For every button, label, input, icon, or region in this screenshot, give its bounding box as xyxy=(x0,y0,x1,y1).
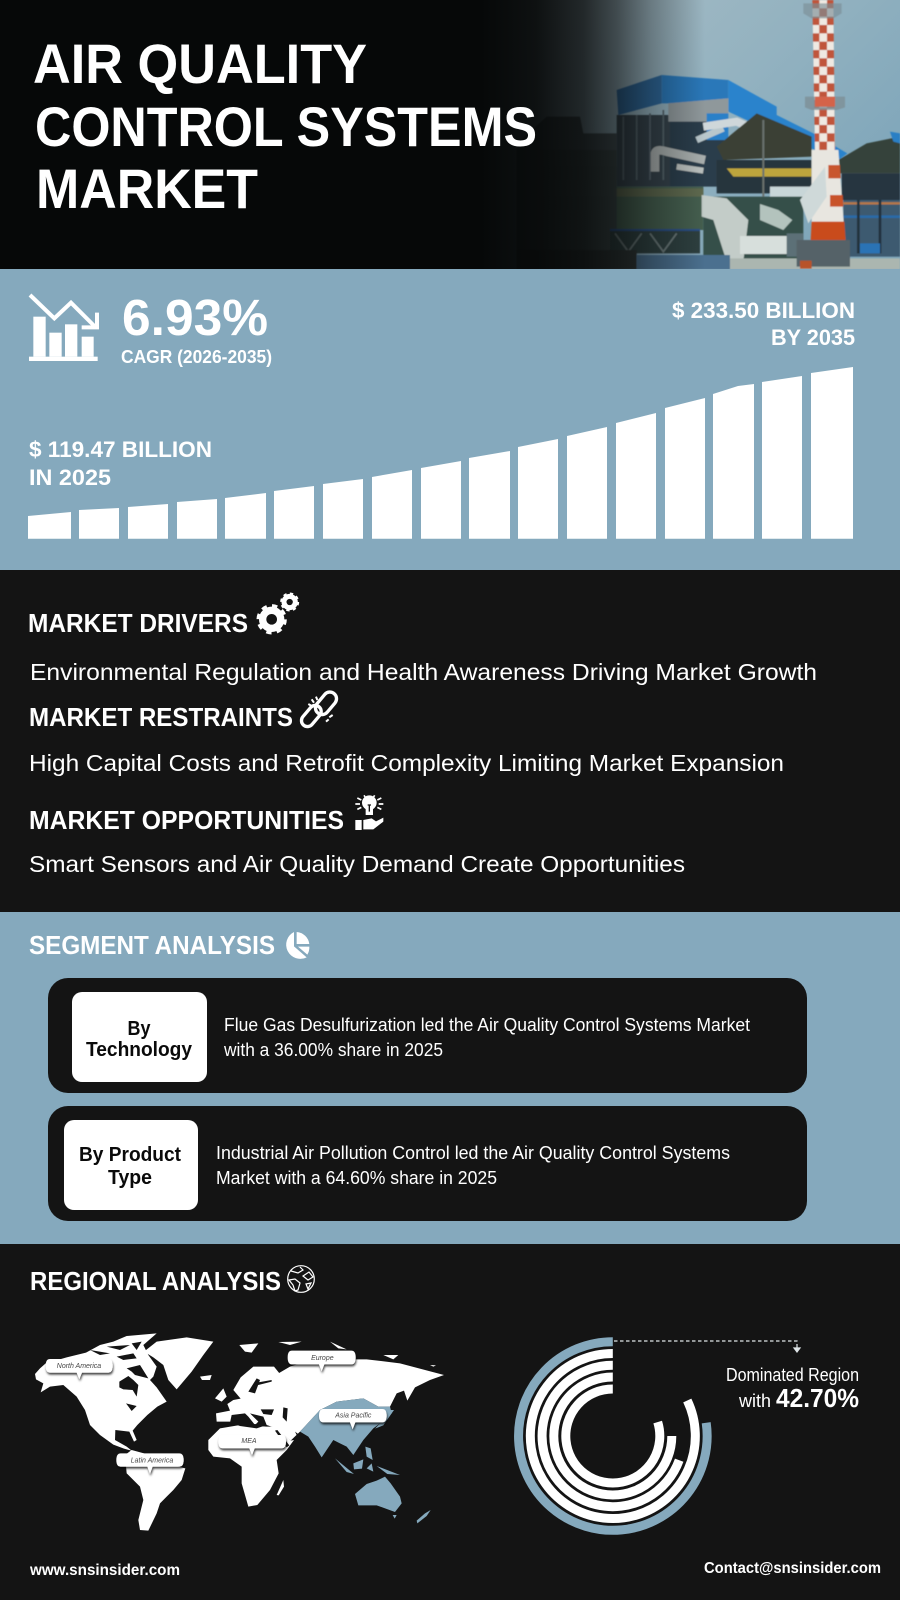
text: dominated region share: 42.70% xyxy=(776,1383,859,1413)
right structures xyxy=(838,137,900,173)
text: restraint: High Capital Costs and Retrofit Complexity Limiting Market Expansion xyxy=(29,750,784,776)
title xyxy=(33,32,537,220)
map: Asia Pacific highlighted xyxy=(300,1398,431,1523)
panel: regional analysis xyxy=(0,1244,900,1600)
blue building xyxy=(617,75,662,115)
label box: By xyxy=(128,1018,151,1040)
card: by product type xyxy=(48,1106,807,1221)
icon: chart with falling arrow xyxy=(29,295,98,361)
heading: segment analysis: SEGMENT ANALYSIS xyxy=(29,930,275,960)
start value xyxy=(29,437,212,490)
heading: regional analysis: REGIONAL ANALYSIS xyxy=(30,1266,281,1296)
green precipitator xyxy=(610,187,703,230)
callout: Europe: Europe xyxy=(311,1355,334,1362)
world map xyxy=(35,1333,444,1531)
photo: industrial air quality plant xyxy=(450,0,900,270)
arrow: dashed leader line xyxy=(614,1341,800,1352)
icon: globe xyxy=(288,1266,314,1292)
callout: Latin America xyxy=(116,1453,184,1474)
end value: $ 233.50 BILLION xyxy=(672,298,855,323)
panel: market dynamics xyxy=(0,570,900,912)
callout: Europe xyxy=(288,1351,356,1371)
text: dominated region share: with xyxy=(738,1391,771,1411)
panel: segment analysis xyxy=(0,912,900,1244)
start value: $ 119.47 BILLION xyxy=(29,437,212,462)
callout: MEA xyxy=(218,1435,286,1455)
CAGR value: 6.93% xyxy=(122,289,268,346)
text block: with a 36.00% share in 2025 xyxy=(223,1040,443,1060)
text block: Market with a 64.60% share in 2025 xyxy=(216,1168,497,1188)
text: dominated region share: Dominated Region xyxy=(726,1365,859,1385)
text block: Industrial Air Pollution Control led the Air Quality Control Systems xyxy=(216,1143,730,1163)
chimney xyxy=(812,0,835,150)
footer: website: www.snsinsider.com xyxy=(29,1562,180,1579)
ground xyxy=(517,250,637,269)
label box xyxy=(72,992,207,1082)
text: dominated region share xyxy=(726,1365,859,1413)
label box: Type xyxy=(108,1167,152,1189)
text: opportunity: Smart Sensors and Air Quality Demand Create Opportunities xyxy=(29,851,685,877)
label box: By Product xyxy=(79,1144,181,1166)
heading: market restraints: MARKET RESTRAINTS xyxy=(29,702,293,732)
CAGR label: CAGR (2026-2035) xyxy=(121,347,272,367)
bar chart: market growth xyxy=(28,367,853,539)
card: by technology xyxy=(48,978,807,1093)
start value: IN 2025 xyxy=(29,465,111,490)
text block xyxy=(216,1143,730,1188)
title: AIR QUALITY xyxy=(33,32,367,95)
text block: Flue Gas Desulfurization led the Air Quality Control Systems Market xyxy=(224,1015,750,1035)
title: CONTROL SYSTEMS xyxy=(35,95,537,158)
callout: Asia Pacific: Asia Pacific xyxy=(334,1413,372,1420)
sheds xyxy=(717,113,812,160)
icon: pie chart xyxy=(286,932,309,959)
icon: gears xyxy=(258,594,298,633)
text block xyxy=(223,1015,750,1060)
icon: broken chain xyxy=(299,689,339,729)
end value: BY 2035 xyxy=(771,325,855,350)
callout: Asia Pacific xyxy=(319,1409,387,1429)
header background xyxy=(0,0,900,270)
callout: North America: North America xyxy=(57,1363,101,1370)
title: MARKET xyxy=(36,157,258,220)
icon: lightbulb in hand xyxy=(355,795,383,830)
map: white landmasses xyxy=(35,1333,444,1531)
heading: market opportunities: MARKET OPPORTUNITIES xyxy=(29,805,344,835)
map: seas and channels xyxy=(90,1342,302,1447)
panel: market size xyxy=(0,269,900,570)
heading: market drivers: MARKET DRIVERS xyxy=(28,608,248,638)
white ducts xyxy=(702,195,748,262)
label box xyxy=(64,1120,198,1210)
end value xyxy=(672,298,855,350)
callout: North America xyxy=(46,1359,113,1379)
callout: Latin America: Latin America xyxy=(131,1458,173,1465)
footer: contact: Contact@snsinsider.com xyxy=(704,1560,881,1577)
far left plant xyxy=(517,117,617,253)
callout: MEA: MEA xyxy=(241,1438,257,1445)
radial chart: dominated region xyxy=(519,1342,707,1530)
text: driver: Environmental Regulation and Health Awareness Driving Market Growth xyxy=(30,659,817,685)
label box: Technology xyxy=(86,1039,193,1061)
